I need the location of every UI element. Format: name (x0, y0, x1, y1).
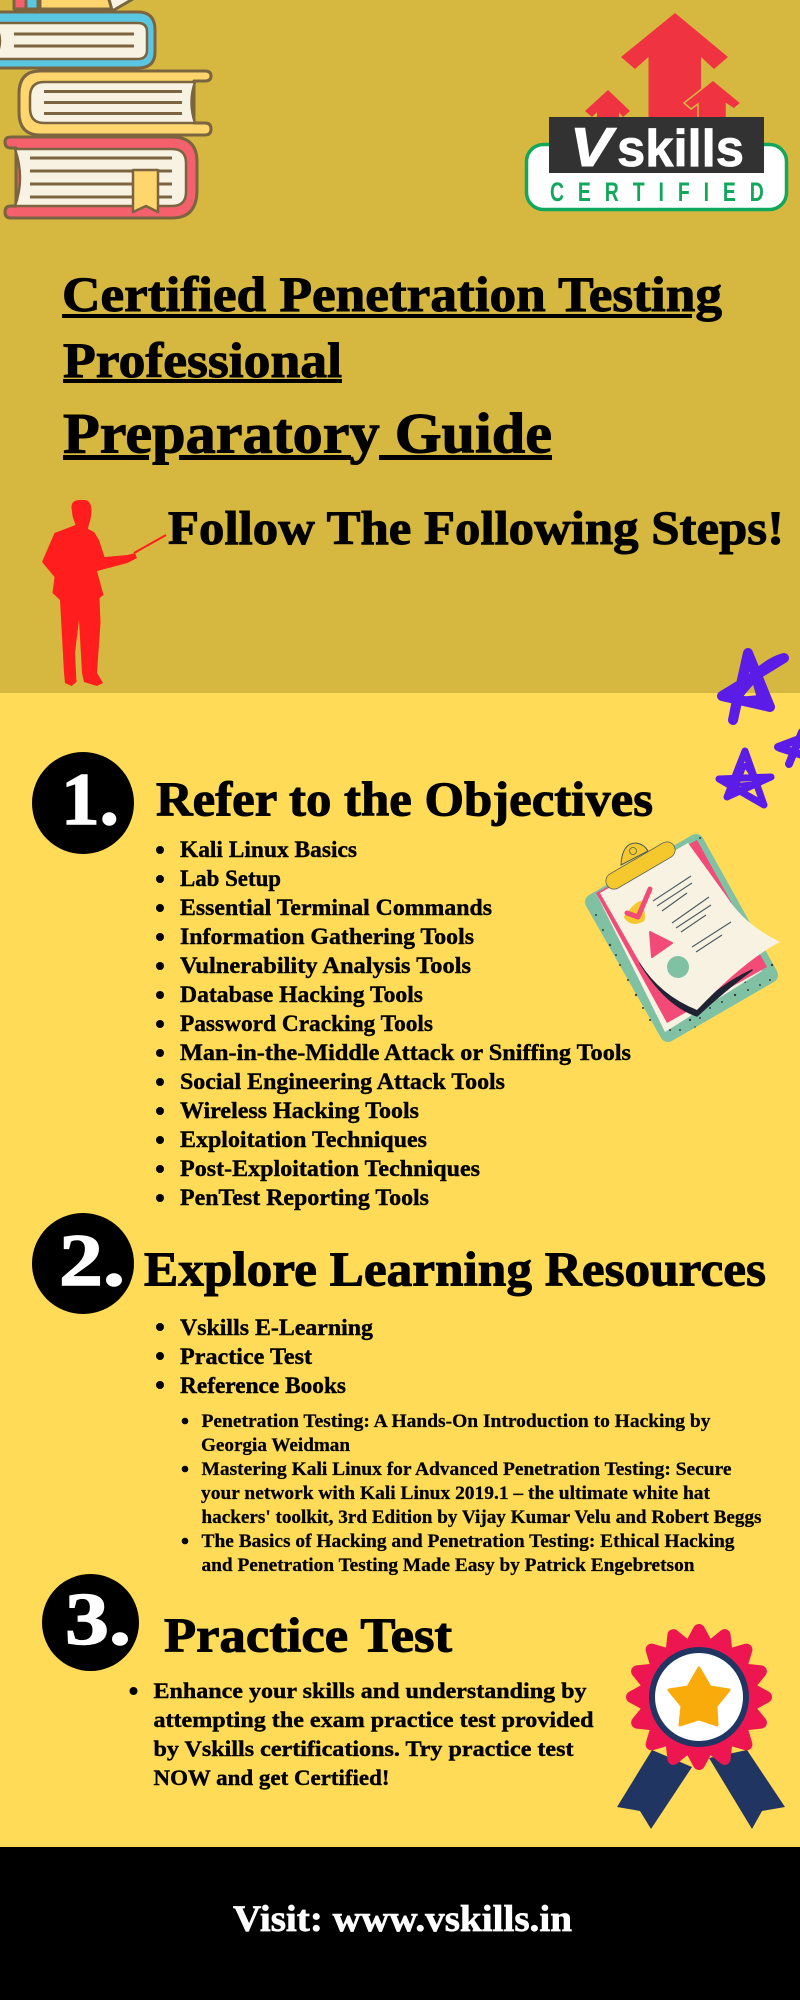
panel: header background (0, 0, 800, 693)
step 2 resources list: Practice Test (180, 1344, 312, 1370)
medal ring (652, 1650, 746, 1744)
icon: award ribbon (617, 1630, 785, 1829)
step 1 objectives list: Password Cracking Tools (180, 1011, 433, 1037)
ribbon tails (617, 1750, 785, 1829)
step 1 objectives list: Database Hacking Tools (180, 982, 423, 1008)
step 3 paragraph: Enhance your skills and understanding by (154, 1678, 587, 1703)
reference books sublist: hackers' toolkit, 3rd Edition by Vijay Kumar Velu and Robert Beggs (202, 1507, 762, 1528)
badge outline (526, 144, 786, 210)
panel: footer background (0, 1847, 800, 2000)
step 1 heading: Refer to the Objectives (156, 772, 653, 826)
title line 2: Professional (63, 332, 342, 388)
title line 1: Certified Penetration Testing (62, 266, 722, 322)
paper (600, 843, 780, 1010)
step 3 paragraph (130, 1678, 594, 1790)
circle mark (667, 956, 689, 978)
step 1 objectives list: Kali Linux Basics (180, 837, 357, 863)
step 1 objectives list: Essential Terminal Commands (180, 895, 492, 921)
step 3 number badge (42, 1574, 139, 1671)
subtitle: Follow The Following Steps! (168, 502, 784, 555)
step 2 heading: Explore Learning Resources (144, 1242, 766, 1296)
step 3 paragraph: NOW and get Certified! (154, 1765, 390, 1790)
step 2 resources list: Reference Books (180, 1373, 346, 1399)
clip loop (621, 843, 648, 865)
step 3 paragraph: attempting the exam practice test provided (154, 1707, 594, 1732)
under sheet (597, 842, 762, 1032)
icon: presenter silhouette with pointer (42, 500, 166, 686)
reference books sublist (182, 1411, 761, 1576)
step 2 resources list (156, 1315, 373, 1399)
step 1 objectives list: Man-in-the-Middle Attack or Sniffing Tools (180, 1040, 631, 1066)
logo text certified: CERTIFIED (550, 177, 764, 207)
step 1 objectives list: Wireless Hacking Tools (180, 1098, 419, 1124)
icon: clipboard (593, 837, 780, 1034)
logo dark box (549, 117, 764, 173)
step 2 number badge: 2. (59, 1220, 125, 1302)
step 1 number badge: 1. (61, 759, 119, 841)
step 3 paragraph: by Vskills certifications. Try practice test (154, 1736, 574, 1761)
panel: steps background (0, 693, 800, 1847)
step 2 number badge (32, 1213, 134, 1314)
top book scrap (14, 0, 138, 10)
step 3 (42, 1574, 594, 1790)
clipboard board (593, 842, 770, 1034)
reference books sublist: The Basics of Hacking and Penetration Testing: Ethical Hacking (202, 1531, 735, 1552)
text lines (653, 876, 731, 952)
step 1 objectives list (156, 837, 631, 1211)
reference books sublist: Mastering Kali Linux for Advanced Penetration Testing: Secure (202, 1459, 732, 1480)
reference books sublist: your network with Kali Linux 2019.1 – the ultimate white hat (201, 1483, 711, 1504)
triangle mark (650, 932, 672, 957)
title line 3: Preparatory Guide (63, 402, 552, 466)
step 1 number badge (32, 752, 134, 854)
step 1 objectives list: Exploitation Techniques (180, 1127, 427, 1153)
reference books sublist: Georgia Weidman (201, 1435, 350, 1456)
step 1 objectives list: Lab Setup (180, 866, 281, 892)
check mark (626, 889, 650, 922)
reference books sublist: Penetration Testing: A Hands-On Introduction to Hacking by (202, 1411, 711, 1432)
paper shadow (640, 963, 752, 1016)
logo wordmark V: V (570, 116, 617, 178)
red book with bookmark (5, 137, 197, 218)
icon: purple doodle stars (719, 653, 800, 805)
step 2 resources list: Vskills E-Learning (180, 1315, 373, 1341)
step 3 number badge: 3. (65, 1579, 131, 1661)
logo: Vskills Certified (526, 13, 786, 210)
pink sheet (596, 840, 767, 1023)
medal star (669, 1668, 729, 1725)
footer link text: Visit: www.vskills.in (233, 1899, 572, 1940)
clip ring (630, 848, 636, 854)
icon: stack of books (0, 0, 211, 218)
step 1 objectives list: Information Gathering Tools (180, 924, 474, 950)
step 2 (32, 1213, 766, 1576)
speckles (595, 837, 773, 1031)
title (62, 266, 722, 466)
logo wordmark skills: skills (617, 120, 744, 178)
step 3 heading: Practice Test (164, 1608, 453, 1662)
clip bar fill (614, 850, 667, 881)
step 1 objectives list: Social Engineering Attack Tools (180, 1069, 505, 1095)
step 1 objectives list: Vulnerability Analysis Tools (180, 953, 471, 979)
yellow book (19, 71, 211, 135)
clip bar (614, 850, 667, 881)
blue book (0, 12, 155, 68)
step 1 objectives list: PenTest Reporting Tools (180, 1185, 429, 1211)
rosette (632, 1630, 766, 1764)
reference books sublist: and Penetration Testing Made Easy by Patrick Engebretson (202, 1555, 695, 1576)
icon: red arrows (585, 13, 741, 118)
step 1 objectives list: Post-Exploitation Techniques (180, 1156, 480, 1182)
step 1 (32, 752, 653, 1211)
